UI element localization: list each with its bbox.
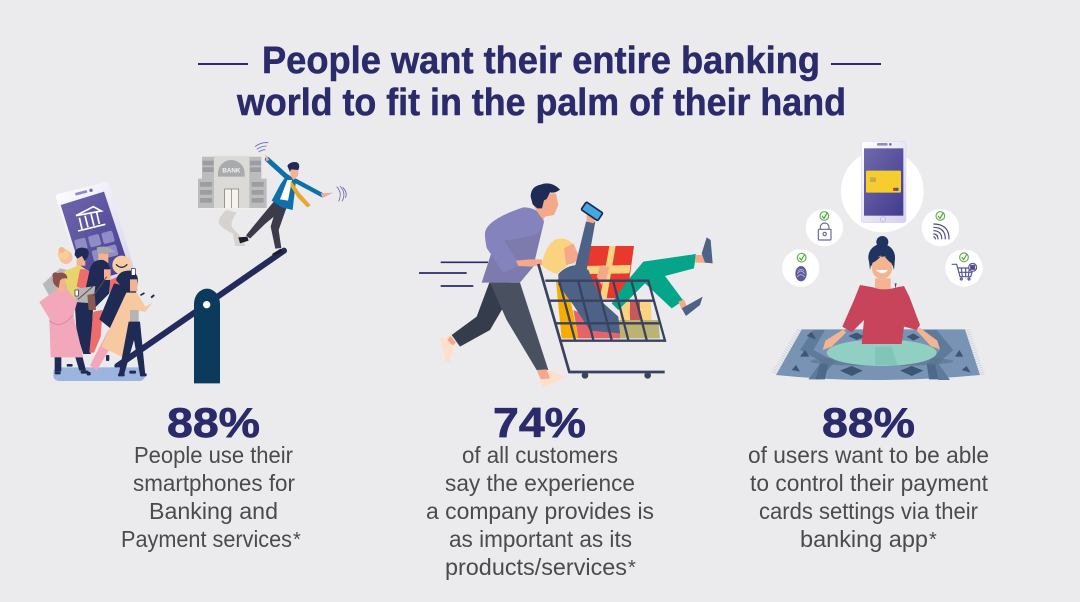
stat column 2: 74% [493,399,586,446]
icon: lock with check [818,212,831,240]
phone with payment card [861,141,906,223]
stat column 1: 88% [167,399,260,446]
base under crowd [53,367,145,381]
stat column 2: say the experience [445,470,635,496]
illustration: crowd outweighs bank on seesaw [39,143,346,383]
flying bank building: BANK [222,167,241,174]
stat column 1: Payment services [121,526,292,552]
stat column 2: a company provides is [426,498,654,524]
cart wheels [582,372,651,379]
stat column 1: smartphones for [133,470,295,496]
giant phone with bank app [56,182,137,290]
meditating woman [823,236,940,366]
man falling off seesaw [238,154,333,256]
seesaw [117,251,284,383]
stat column 3: cards settings via their [759,498,978,524]
stat column 2: products/services [445,554,627,580]
crowd of people with phones [39,246,155,376]
speed lines [419,262,488,286]
stat column 3: * [929,529,937,551]
stat column 2: as important as its [449,526,632,552]
icon: contactless waves with check [933,212,949,239]
icon: shopping cart with check [952,253,977,280]
icon: fingerprint with check [795,253,807,281]
woman in cart with gift and phone [542,202,713,338]
stat column 1 [121,399,301,552]
stat column 1: People use their [134,442,293,468]
woven rug [773,329,983,380]
stat column 3: to control their payment [750,470,989,496]
illustration: woman meditating with phone and security icons [773,141,983,380]
stat column 3: 88% [822,399,915,446]
stat column 3: of users want to be able [748,442,989,468]
stat column 2: * [628,557,636,579]
stat column 1: * [293,529,301,551]
motion waves [255,143,346,201]
stat column 2 [426,399,654,580]
illustration: couple running with shopping cart [419,183,713,387]
shopping cart [538,264,665,372]
stat column 1: Banking and [149,498,278,524]
running man [440,183,566,387]
flying bank building [198,155,267,246]
white icon circles [782,150,983,287]
title: world to fit in the palm of their hand [236,82,846,124]
stat column 3: banking app [800,526,928,552]
title [198,40,881,124]
stat column 3 [748,399,989,552]
title: People want their entire banking [262,40,820,82]
stat column 2: of all customers [462,442,618,468]
